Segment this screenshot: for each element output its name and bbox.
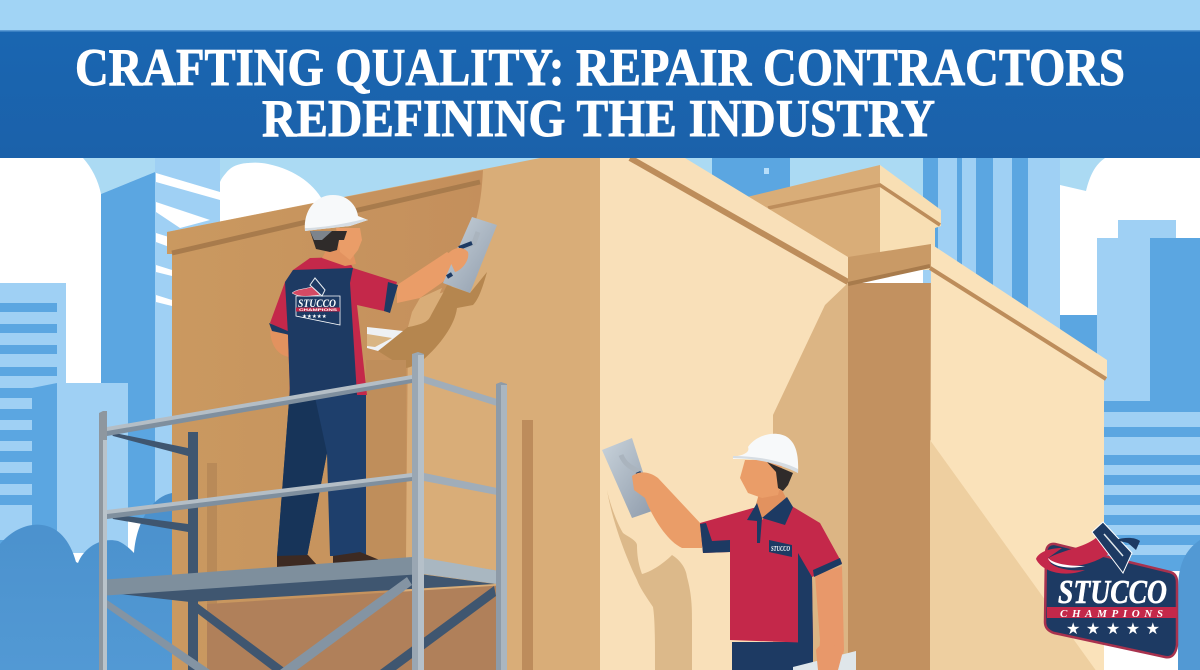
right skyline columns [923, 158, 1105, 358]
clipboard and hand [793, 644, 856, 670]
red band [1047, 607, 1177, 618]
shirt [700, 505, 842, 643]
right wing wall [930, 244, 1110, 670]
lit plaster patch [408, 288, 442, 327]
left wall face [167, 158, 600, 670]
hard hat [305, 195, 368, 231]
collar [747, 497, 793, 543]
arm [632, 472, 702, 548]
shirt logo [292, 278, 340, 325]
right arm [397, 252, 467, 303]
platform [99, 557, 505, 670]
front posts [99, 352, 507, 670]
head [740, 460, 782, 498]
right arm [815, 566, 844, 670]
back block [747, 165, 941, 270]
shoes [277, 552, 382, 567]
trowel [443, 217, 497, 293]
stucco building [167, 158, 1110, 670]
left trees [0, 493, 172, 670]
shirt emblem [769, 540, 792, 557]
logo wordmark: STUCCO [1058, 574, 1167, 611]
left low buildings [0, 283, 128, 560]
left arm [270, 328, 290, 357]
pier [848, 244, 931, 670]
pants [732, 642, 813, 670]
hawk board [367, 327, 403, 351]
shirt logo: ★★★★★ [302, 314, 327, 320]
front rails and posts [107, 375, 497, 670]
shirt logo: CHAMPIONS [299, 308, 338, 312]
title line 2: REDEFINING THE INDUSTRY [262, 90, 935, 148]
company logo badge [1036, 522, 1177, 657]
back posts and dark braces [110, 432, 496, 670]
upper worker [269, 195, 497, 567]
lower worker [602, 434, 856, 670]
hard hat [733, 434, 798, 473]
title banner [0, 30, 1200, 158]
logo stars: ★★★★★ [1066, 619, 1160, 638]
shirt logo: STUCCO [298, 296, 336, 310]
trowel [602, 438, 655, 518]
scaffold [99, 195, 507, 670]
left tower [101, 158, 220, 538]
pants [277, 388, 366, 557]
neck and head [322, 240, 356, 266]
neck [755, 490, 787, 520]
right wall face [600, 158, 848, 670]
shirt emblem: STUCCO [771, 545, 790, 553]
shirt [270, 257, 397, 395]
wall shadow under arm [378, 272, 487, 368]
badge shield [1045, 544, 1177, 657]
swoosh [1045, 537, 1110, 566]
logo subtitle: CHAMPIONS [1060, 608, 1163, 620]
trowel mark [1092, 522, 1132, 573]
right buildings [1060, 220, 1200, 670]
